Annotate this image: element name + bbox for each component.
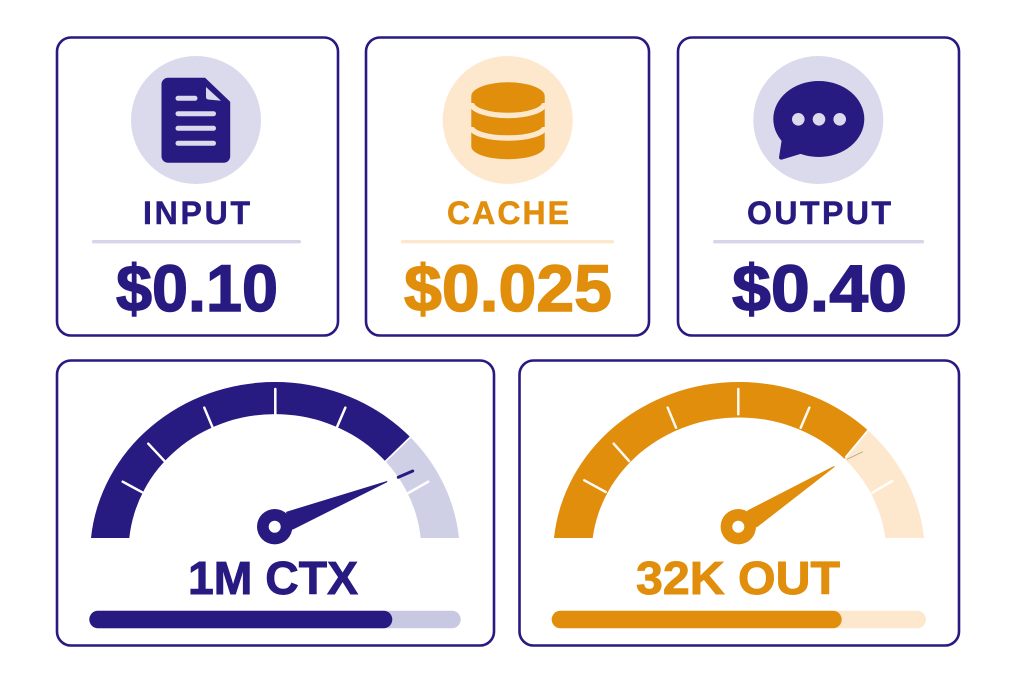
panel: output gauge	[520, 360, 959, 646]
gauge: 32K output	[554, 382, 924, 544]
panel: context gauge	[57, 360, 494, 646]
panel: cache price	[366, 38, 649, 336]
icon: document	[131, 56, 261, 184]
price: input: $0.10	[116, 251, 278, 325]
panel: output price	[678, 38, 959, 336]
heading: cache: CACHE	[447, 195, 569, 231]
icon: speech bubble	[753, 56, 883, 184]
needle	[721, 467, 834, 544]
needle	[257, 482, 387, 544]
heading: output: OUTPUT	[747, 195, 891, 231]
panel: input price	[57, 38, 338, 336]
label: 32K OUT: 32K OUT	[636, 552, 840, 604]
price: cache: $0.025	[404, 251, 612, 325]
heading: input: INPUT	[143, 195, 250, 231]
gauge: 1M context	[91, 382, 459, 544]
price: output: $0.40	[732, 251, 907, 325]
progress bar: output	[552, 611, 926, 628]
progress bar: context	[89, 611, 461, 628]
icon: database	[443, 56, 573, 184]
label: 1M CTX: 1M CTX	[188, 552, 358, 604]
